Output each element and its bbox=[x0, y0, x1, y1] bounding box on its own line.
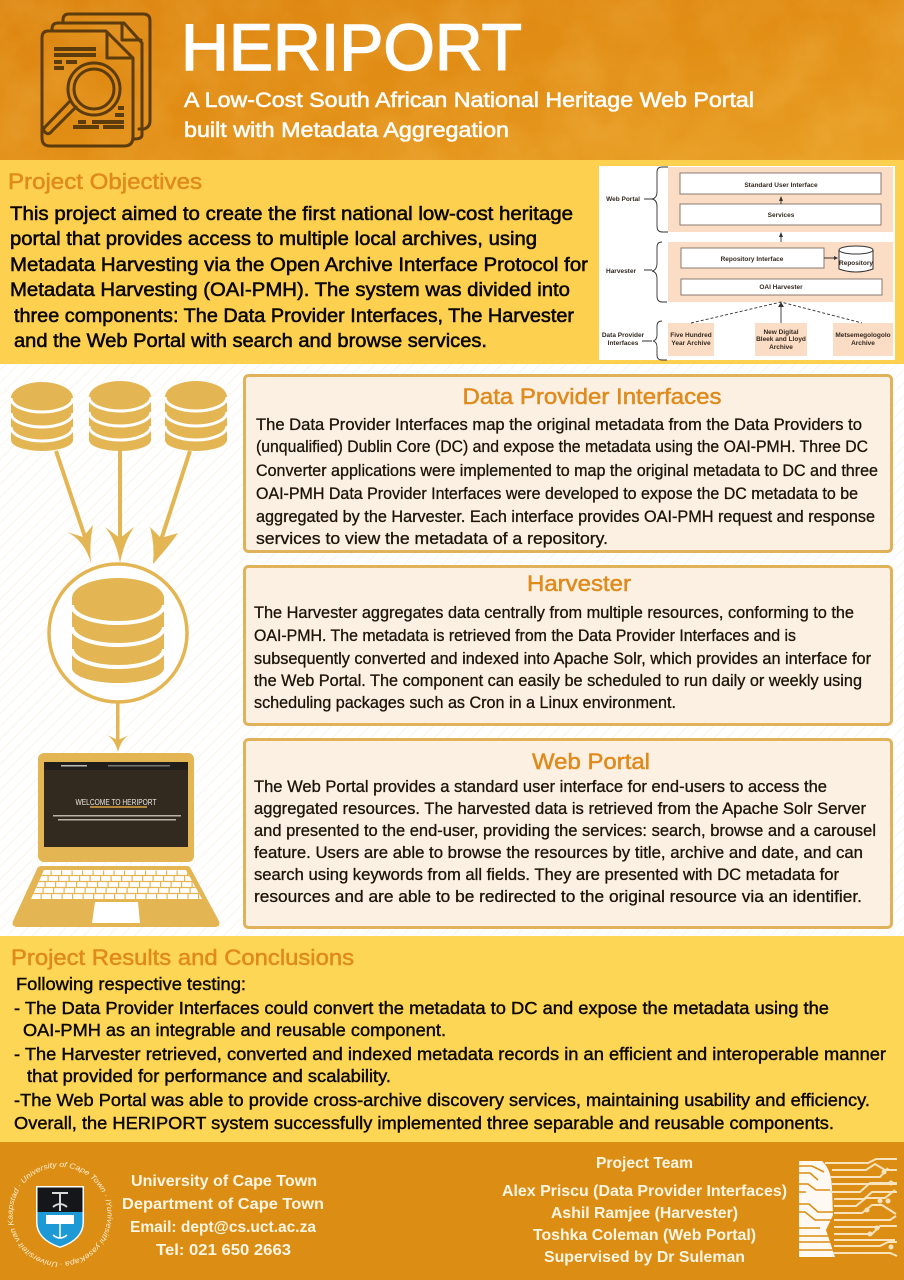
icon: laptop showing web portal bbox=[13, 753, 219, 927]
chart: system architecture diagram: Standard User Interface bbox=[744, 182, 818, 189]
page background bbox=[0, 364, 904, 936]
panel: data provider interfaces bbox=[244, 376, 892, 552]
body text bbox=[256, 416, 878, 548]
arrow: harvester to laptop bbox=[107, 702, 129, 752]
panel: footer bbox=[0, 1142, 904, 1280]
contact details: University of Cape Town bbox=[131, 1173, 317, 1190]
contact details bbox=[122, 1173, 324, 1259]
chart: system architecture diagram: Bleek and Lloyd bbox=[756, 336, 806, 343]
body text: resources and are able to be redirected to the original resource via an identifier. bbox=[254, 888, 862, 906]
text: objectives: Metadata Harvesting via the Open Archive Interface Protocol for bbox=[10, 254, 589, 276]
arrow: databases to harvester bbox=[56, 451, 190, 564]
chart: system architecture diagram: Repository Interface bbox=[721, 256, 784, 263]
results text: -The Web Portal was able to provide cross-archive discovery services, maintaining usability and efficiency. bbox=[14, 1090, 870, 1110]
chart: system architecture diagram bbox=[599, 166, 895, 360]
icon: circuit board head bbox=[799, 1159, 897, 1257]
body text: and presented to the end-user, providing the services: search, browse and a carousel bbox=[254, 822, 876, 840]
text: objectives: and the Web Portal with search and browse services. bbox=[14, 330, 487, 352]
results text: OAI-PMH as an integrable and reusable component. bbox=[23, 1020, 446, 1040]
project team: Ashil Ramjee (Harvester) bbox=[551, 1205, 738, 1222]
keyboard bbox=[30, 870, 205, 899]
chart: system architecture diagram: Data Provider bbox=[602, 332, 645, 339]
chart: system architecture diagram: Harvester bbox=[606, 268, 636, 275]
results text bbox=[14, 974, 886, 1133]
project team bbox=[502, 1155, 787, 1266]
heading: project objectives: Project Objectives bbox=[8, 169, 202, 194]
body text: OAI-PMH. The metadata is retrieved from the Data Provider Interfaces and is bbox=[254, 627, 796, 645]
chart: system architecture diagram: Metsemegologolo bbox=[835, 332, 891, 339]
panel: header banner bbox=[0, 0, 904, 160]
body text: scheduling packages such as Cron in a Linux environment. bbox=[254, 694, 676, 712]
panel: web portal bbox=[244, 740, 892, 928]
chart: system architecture diagram: Services bbox=[768, 212, 795, 219]
trackpad bbox=[92, 902, 140, 923]
results text: Overall, the HERIPORT system successfully implemented three separable and reusable components. bbox=[14, 1113, 834, 1133]
text: objectives: three components: The Data Provider Interfaces, The Harvester bbox=[14, 305, 575, 327]
chart: system architecture diagram: Archive bbox=[851, 340, 875, 347]
chart: system architecture diagram: Year Archive bbox=[671, 340, 711, 347]
icon: university seal: Universiteit van Kaapstad · University of Cape Town · iYunivesithi yaseKapa · bbox=[8, 1162, 113, 1268]
body text: subsequently converted and indexed into Apache Solr, which provides an interface for bbox=[254, 650, 872, 668]
text: objectives bbox=[10, 203, 589, 352]
panel: project objectives bbox=[0, 160, 904, 364]
body text: The Web Portal provides a standard user interface for end-users to access the bbox=[254, 778, 827, 796]
heading: Web Portal bbox=[532, 749, 650, 774]
contact details: Email: dept@cs.uct.ac.za bbox=[130, 1219, 316, 1236]
body text: services to view the metadata of a repository. bbox=[256, 530, 608, 548]
icon: central harvester database in circle bbox=[49, 564, 187, 702]
chart: system architecture diagram: Archive bbox=[769, 344, 793, 351]
body text: feature. Users are able to browse the resources by title, archive and date, and can bbox=[254, 844, 863, 862]
body text: aggregated resources. The harvested data is retrieved from the Apache Solr Server bbox=[254, 800, 867, 818]
chart: system architecture diagram: Web Portal bbox=[606, 196, 640, 203]
laptop screen bbox=[44, 762, 188, 847]
text: objectives: Metadata Harvesting (OAI-PMH). The system was divided into bbox=[10, 279, 570, 301]
laptop screen: WELCOME TO HERIPORT bbox=[76, 798, 157, 807]
text: objectives: portal that provides access to multiple local archives, using bbox=[10, 228, 537, 250]
icon: documents with magnifying glass bbox=[42, 14, 150, 146]
contact details: Department of Cape Town bbox=[122, 1196, 324, 1213]
heading: Data Provider Interfaces bbox=[462, 384, 722, 409]
body text: (unqualified) Dublin Core (DC) and expose the metadata using the OAI-PMH. Three DC bbox=[256, 438, 868, 456]
chart: system architecture diagram: Repository bbox=[839, 260, 873, 267]
subtitle: A Low-Cost South African National Heritage Web Portal bbox=[184, 88, 754, 112]
heading: Project Results and Conclusions bbox=[11, 945, 354, 970]
contact details: Tel: 021 650 2663 bbox=[156, 1242, 291, 1259]
title: HERIPORT bbox=[181, 10, 522, 84]
project team: Supervised by Dr Suleman bbox=[544, 1249, 745, 1266]
results text: that provided for performance and scalability. bbox=[27, 1066, 391, 1086]
chart: system architecture diagram: OAI Harvester bbox=[759, 284, 803, 291]
body text: search using keywords from all fields. They are presented with DC metadata for bbox=[254, 866, 840, 884]
body text: OAI-PMH Data Provider Interfaces were developed to expose the DC metadata to be bbox=[256, 485, 858, 503]
chart: system architecture diagram: New Digital bbox=[763, 329, 799, 336]
project team: Toshka Coleman (Web Portal) bbox=[533, 1227, 756, 1244]
body text: aggregated by the Harvester. Each interface provides OAI-PMH request and response bbox=[256, 508, 875, 526]
body text: The Data Provider Interfaces map the original metadata from the Data Providers to bbox=[256, 416, 862, 434]
body text: The Harvester aggregates data centrally from multiple resources, conforming to the bbox=[254, 604, 854, 622]
body text bbox=[254, 604, 872, 712]
subtitle bbox=[184, 88, 754, 142]
heading: Harvester bbox=[527, 571, 632, 596]
project team: Project Team bbox=[596, 1155, 693, 1172]
results text: Following respective testing: bbox=[16, 974, 246, 994]
chart: system architecture diagram: Five Hundred bbox=[670, 332, 712, 339]
icon: database 1 bbox=[11, 382, 73, 451]
body text: Converter applications were implemented to map the original metadata to DC and three bbox=[256, 462, 878, 480]
icon: database 3 bbox=[165, 381, 227, 451]
body text bbox=[254, 778, 876, 906]
project team: Alex Priscu (Data Provider Interfaces) bbox=[502, 1183, 787, 1200]
icon: database 2 bbox=[89, 381, 151, 451]
results text: - The Data Provider Interfaces could convert the metadata to DC and expose the metadata using the bbox=[14, 998, 829, 1018]
icon: three source databases bbox=[11, 381, 227, 451]
panel: project results and conclusions bbox=[0, 936, 904, 1142]
text: objectives: This project aimed to create the first national low-cost heritage bbox=[10, 203, 573, 225]
chart: system architecture diagram: Interfaces bbox=[608, 340, 639, 347]
subtitle: built with Metadata Aggregation bbox=[184, 118, 509, 142]
results text: - The Harvester retrieved, converted and indexed metadata records in an efficient and interoperable manner bbox=[14, 1044, 886, 1064]
panel: harvester bbox=[244, 566, 892, 724]
body text: the Web Portal. The component can easily be scheduled to run daily or weekly using bbox=[254, 672, 862, 690]
